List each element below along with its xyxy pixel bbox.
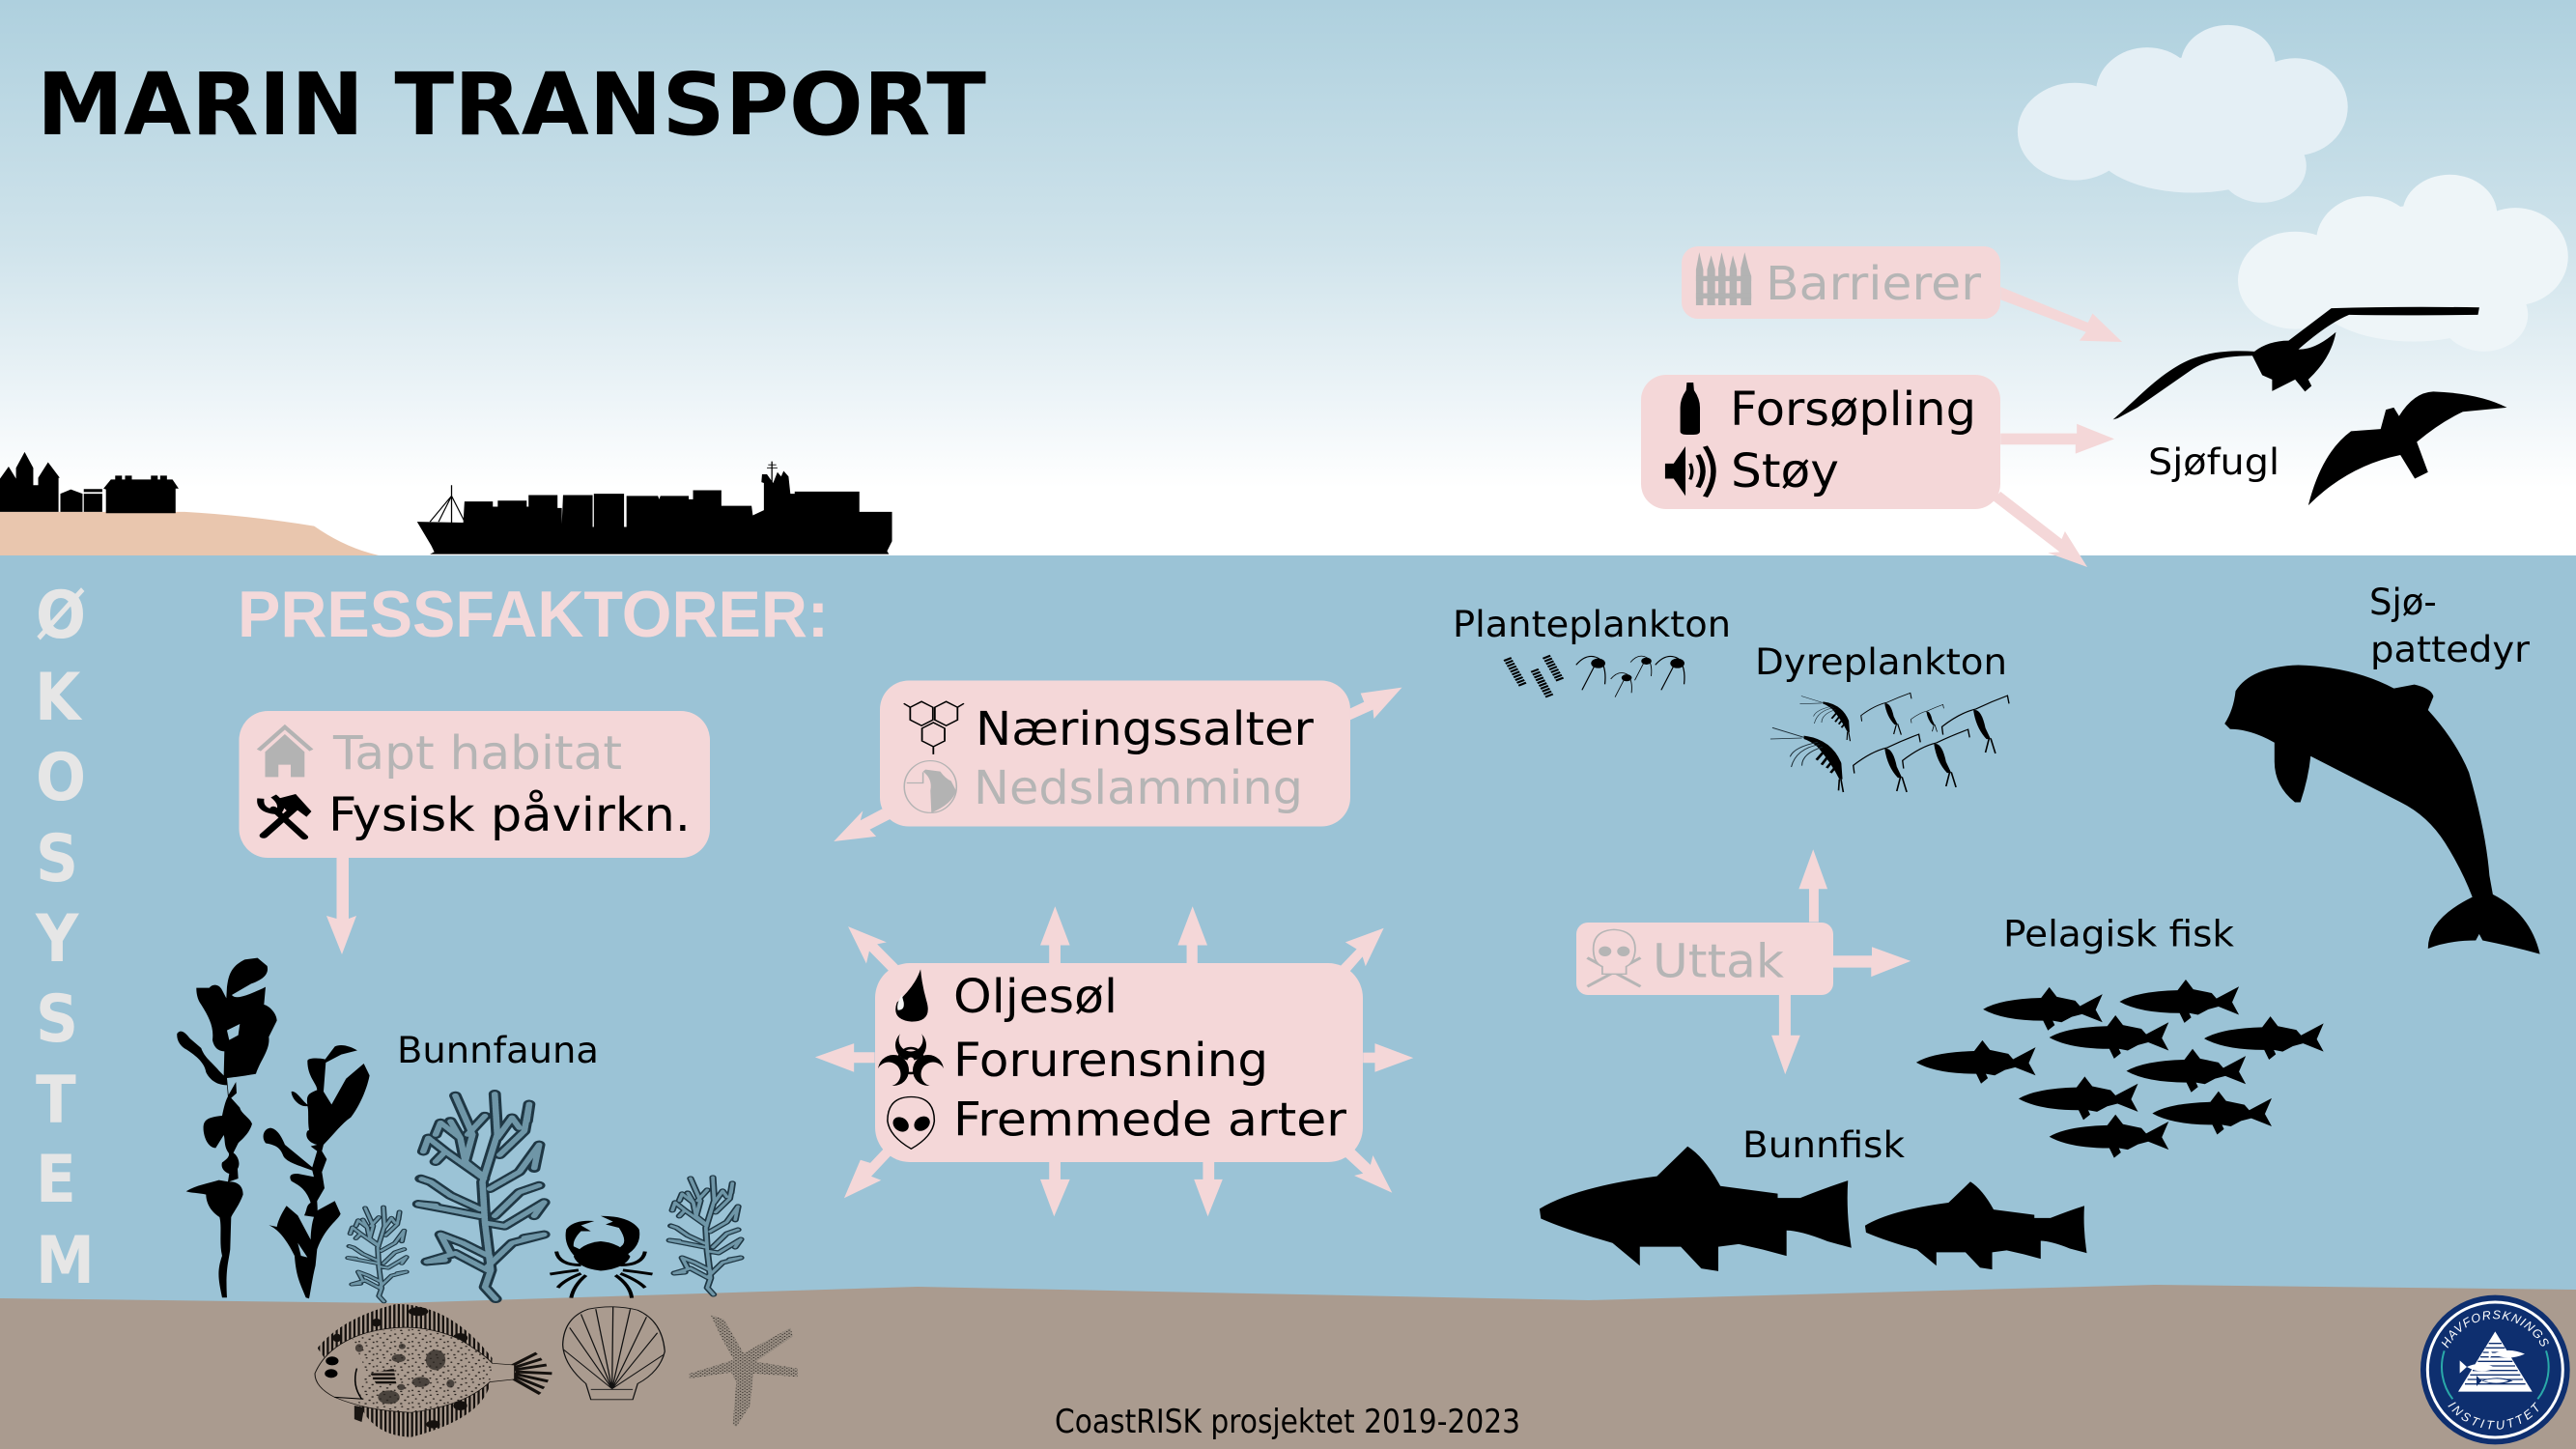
icon: house (259, 727, 311, 777)
arrows radiating from main pollution box (815, 906, 1413, 1216)
label: Sjø-pattedyr: Sjø- (2369, 582, 2437, 623)
kelp left (177, 958, 277, 1297)
dolphin (2224, 665, 2540, 954)
arrow: støy to sea (1993, 492, 2087, 567)
arrow: barrierer to birds (2000, 287, 2122, 342)
pelagic fish school (1916, 980, 2324, 1158)
icon: alien (888, 1097, 934, 1149)
coral small left (348, 1208, 407, 1301)
seabird upper (2113, 307, 2479, 419)
logo: Havforskningsinstituttet: HAVFORSKNINGS (2442, 1310, 2549, 1349)
cloud left (2018, 25, 2348, 203)
Tapt habitat / Fysisk påvirkning box: Tapt habitat (332, 726, 622, 781)
phytoplankton (1507, 656, 1684, 697)
label: Sjøfugl: Sjøfugl (2148, 441, 2279, 483)
sky background (0, 0, 2576, 556)
shore with buildings and ship (0, 452, 892, 555)
cloud right (2238, 175, 2568, 352)
coral small right (669, 1178, 741, 1294)
Næringssalter box (880, 680, 1350, 827)
clouds (2018, 25, 2568, 352)
kelp right (264, 1045, 370, 1298)
Forsøpling and Støy box (1641, 375, 2000, 509)
label: Bunnfisk: Bunnfisk (1742, 1124, 1906, 1166)
icon: speaker (1665, 446, 1713, 497)
vertical word: ØKOSYSTEM: S (36, 821, 78, 897)
arrow: fysisk påvirkning down (326, 858, 356, 954)
buildings silhouette (0, 452, 179, 513)
arrows from air pressure boxes (1993, 287, 2122, 567)
arrow: forsøpling to birds (2000, 424, 2114, 454)
vertical word: ØKOSYSTEM: K (35, 660, 83, 736)
sea bed (0, 1285, 2576, 1449)
Barrierer box (1682, 246, 2000, 319)
vertical word: ØKOSYSTEM (35, 578, 95, 1299)
icon: sediment (904, 761, 956, 812)
label: Dyreplankton: Dyreplankton (1755, 641, 2007, 683)
heading: PRESSFAKTORER: PRESSFAKTORER: (238, 578, 829, 651)
benthic fauna (315, 1094, 798, 1437)
beach (0, 512, 379, 555)
vertical word: ØKOSYSTEM: Y (35, 901, 79, 978)
Forsøpling and Støy box: Forsøpling (1730, 383, 1976, 437)
kelp (177, 958, 370, 1298)
starfish (690, 1315, 798, 1427)
flatfish (315, 1304, 552, 1437)
Uttak box (1576, 923, 1833, 995)
logo: Havforskningsinstituttet: INSTITUTTET (2448, 1402, 2538, 1430)
vertical word: ØKOSYSTEM: S (36, 981, 78, 1058)
Næringssalter box: Næringssalter (976, 702, 1314, 756)
label: Pelagisk fisk: Pelagisk fisk (2003, 914, 2235, 954)
Uttak box: Uttak (1653, 935, 1784, 989)
bottom fish (1540, 1147, 2086, 1271)
Tapt habitat / Fysisk påvirkning box: Fysisk påvirkn. (328, 788, 691, 842)
icon: tools (261, 794, 311, 838)
label: Planteplankton: Planteplankton (1453, 604, 1731, 645)
icon: bottle (1681, 383, 1700, 435)
icon: molecule (904, 701, 964, 754)
scallop shell (563, 1307, 665, 1400)
vertical word: ØKOSYSTEM: E (36, 1142, 76, 1218)
icon: biohazard (877, 1028, 945, 1086)
logo: Havforskningsinstituttet (2420, 1294, 2570, 1445)
coral large (418, 1094, 544, 1299)
icon: oil drop (895, 969, 928, 1022)
vertical word: ØKOSYSTEM: O (36, 740, 86, 816)
vertical word: ØKOSYSTEM: M (36, 1223, 95, 1299)
Forsøpling and Støy box: Støy (1731, 444, 1839, 498)
Oljesøl / Forurensning / Fremmede arter box: Fremmede arter (953, 1094, 1346, 1148)
project credit: CoastRISK prosjektet 2019-2023 (1055, 1403, 1520, 1441)
Tapt habitat / Fysisk påvirkning box (240, 711, 710, 858)
Oljesøl / Forurensning / Fremmede arter box (875, 963, 1363, 1162)
container ship silhouette (417, 462, 892, 554)
seabirds (2113, 307, 2506, 505)
Næringssalter box: Nedslamming (974, 761, 1303, 815)
label: Sjø-pattedyr: pattedyr (2370, 629, 2531, 670)
label: Bunnfauna: Bunnfauna (397, 1030, 599, 1071)
Oljesøl / Forurensning / Fremmede arter box: Oljesøl (953, 970, 1118, 1024)
zooplankton (1770, 693, 2009, 792)
seabird lower (2308, 391, 2506, 505)
Barrierer box: Barrierer (1766, 257, 1981, 311)
arrows from Uttak (1771, 849, 1911, 1074)
sea water (0, 555, 2576, 1309)
icon: skull and crossbones (1587, 929, 1640, 986)
vertical word: ØKOSYSTEM: Ø (36, 578, 86, 654)
crab (550, 1216, 653, 1298)
title: MARIN TRANSPORT (37, 54, 986, 155)
icon: fence (1696, 252, 1751, 305)
arrows from Næringssalter (834, 688, 1402, 841)
Oljesøl / Forurensning / Fremmede arter box: Forurensning (953, 1034, 1268, 1088)
vertical word: ØKOSYSTEM: T (36, 1063, 76, 1139)
